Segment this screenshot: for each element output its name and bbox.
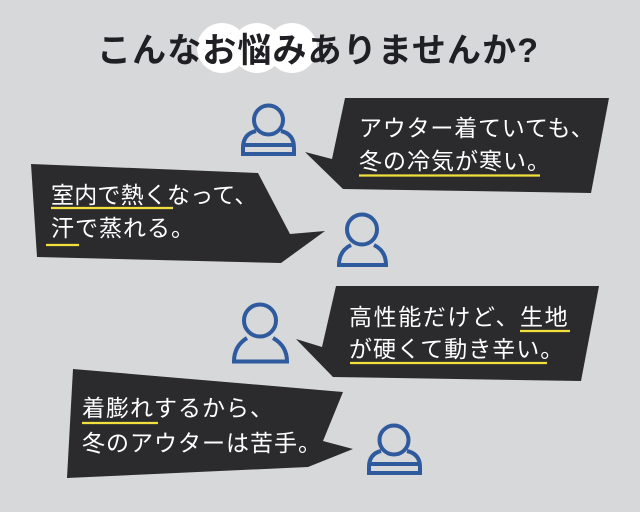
- icon: person with striped shirt, bottom: [369, 426, 420, 473]
- panel: speech bubble 1: [305, 98, 609, 193]
- text: bubble 4: 着膨れするから、: [82, 395, 274, 421]
- icon: person, third: [234, 304, 287, 362]
- text: bubble 3: 高性能だけど、生地: [349, 304, 569, 330]
- panel: speech bubble 3: が硬くて動き辛い。: [349, 336, 564, 362]
- icon: person, second: [339, 214, 386, 265]
- icon: person with striped shirt, top: [243, 106, 294, 154]
- panel: speech bubble 1: 冬の冷気が寒い。: [359, 148, 551, 174]
- text: bubble 1: アウター着ていても、: [359, 115, 594, 141]
- title: こんなお悩みありませんか?: [97, 32, 538, 70]
- panel: speech bubble 3: [296, 286, 599, 381]
- text: bubble 2: 室内で熱くなって、: [51, 182, 258, 208]
- panel: speech bubble 4: 冬のアウターは苦手。: [82, 430, 322, 456]
- panel: speech bubble 2: [31, 164, 325, 263]
- panel: speech bubble 2: 汗で蒸れる。: [51, 215, 195, 241]
- panel: speech bubble 4: [67, 369, 353, 478]
